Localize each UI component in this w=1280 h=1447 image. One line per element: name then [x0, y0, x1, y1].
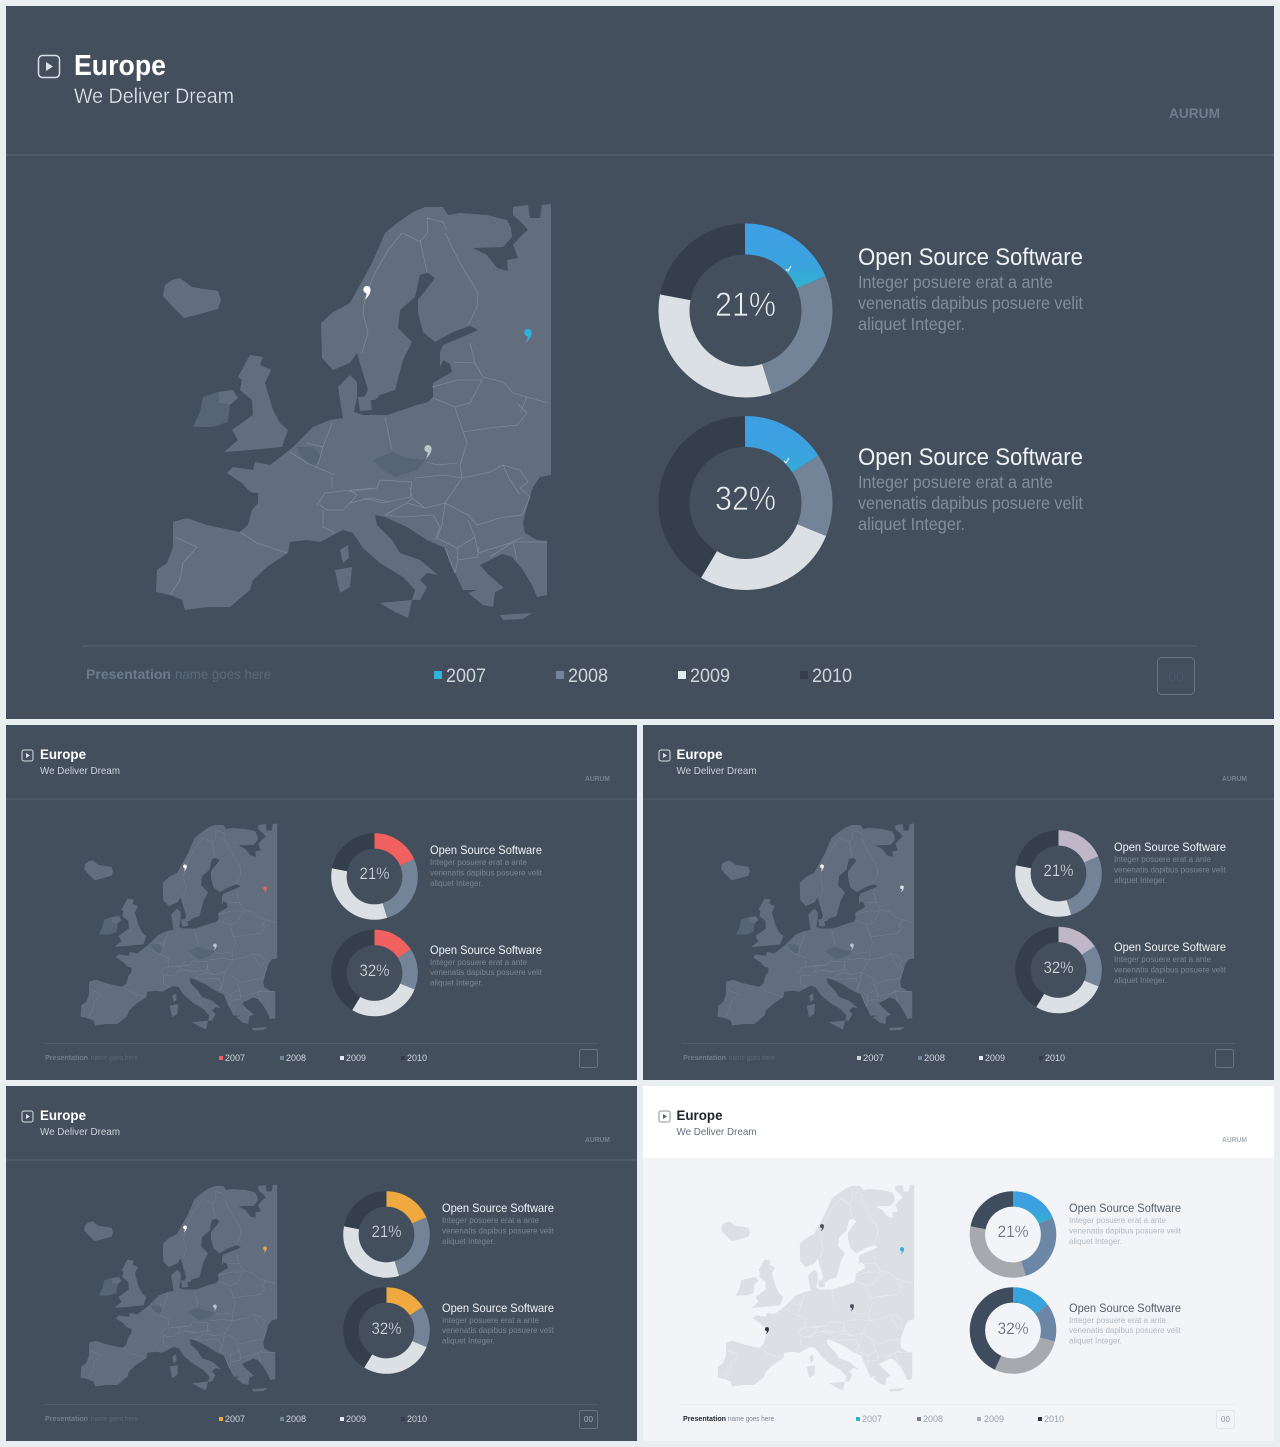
legend — [856, 1414, 1064, 1425]
map markers — [820, 864, 904, 950]
donut chart 21%: 21% — [360, 864, 390, 883]
legend — [219, 1053, 427, 1064]
text block: first donut: Open Source Software — [430, 843, 542, 857]
text block: first donut: Integer posuere erat a ante — [858, 272, 1053, 292]
footer presentation name — [683, 1055, 775, 1062]
donut chart 21% — [339, 841, 410, 912]
footer presentation name: name goes here — [175, 666, 271, 682]
text block: first donut: venenatis dapibus posuere velit — [858, 293, 1083, 313]
legend: 2008 — [286, 1414, 306, 1425]
title: Europe — [74, 50, 166, 82]
text block: first donut: aliquet Integer. — [430, 878, 483, 888]
map markers — [765, 1224, 904, 1335]
legend: 2010 — [407, 1053, 427, 1064]
page number box — [580, 1050, 598, 1068]
legend: 2008 — [923, 1414, 943, 1425]
footer presentation name: Presentation — [683, 1055, 726, 1062]
map of Europe — [156, 204, 551, 620]
page number box: 00 — [1221, 1415, 1230, 1424]
donut chart 32%: 32% — [360, 961, 390, 980]
legend: 2010 — [1044, 1414, 1064, 1425]
footer presentation name: Presentation — [45, 1055, 88, 1062]
donut chart 32%: 32% — [1044, 958, 1074, 977]
legend: 2007 — [225, 1053, 245, 1064]
subtitle: We Deliver Dream — [676, 1126, 757, 1138]
donut chart 21%: 21% — [1044, 861, 1074, 880]
donut chart 32% — [339, 937, 410, 1009]
text block: first donut: aliquet Integer. — [858, 314, 965, 334]
text block: first donut: venenatis dapibus posuere velit — [430, 868, 543, 878]
brand label: AURUM — [1222, 1137, 1247, 1144]
donut chart 32% — [1023, 934, 1094, 1006]
text block: first donut — [430, 843, 543, 888]
panel: main slide — [6, 6, 1274, 719]
text block: first donut: Open Source Software — [1114, 840, 1226, 854]
panel: light variant — [643, 1086, 1274, 1441]
text block: second donut — [442, 1301, 555, 1346]
subtitle: We Deliver Dream — [40, 765, 120, 777]
donut chart 32% — [351, 1295, 422, 1366]
footer presentation name: Presentation — [683, 1416, 726, 1423]
text block: second donut: aliquet Integer. — [1069, 1336, 1122, 1346]
legend — [434, 666, 852, 687]
text block: second donut — [1114, 940, 1227, 985]
icon: play button — [22, 1111, 33, 1122]
text block: second donut: aliquet Integer. — [858, 514, 965, 534]
legend: 2009 — [346, 1414, 366, 1425]
icon: play button — [659, 750, 670, 761]
donut chart 32% — [674, 432, 817, 574]
legend: 2009 — [346, 1053, 366, 1064]
donut chart 32%: 32% — [372, 1319, 402, 1338]
page number box — [1158, 658, 1194, 694]
title: Europe — [676, 1107, 723, 1123]
icon: play button — [38, 56, 60, 78]
footer presentation name: name goes here — [729, 1055, 775, 1062]
footer presentation name — [45, 1055, 138, 1062]
subtitle: We Deliver Dream — [40, 1126, 120, 1138]
text block: second donut: Integer posuere erat a ante — [858, 472, 1053, 492]
legend: 2008 — [568, 666, 608, 687]
page number box: 00 — [584, 1415, 593, 1424]
donut chart 21% — [351, 1199, 422, 1270]
text block: second donut: Integer posuere erat a ante — [1069, 1315, 1166, 1325]
text block: first donut — [1114, 840, 1227, 885]
text block: second donut: aliquet Integer. — [1114, 975, 1167, 985]
legend — [857, 1053, 1065, 1064]
donut chart 21%: 21% — [372, 1222, 402, 1241]
legend: 2009 — [985, 1053, 1005, 1064]
text block: first donut: Integer posuere erat a ante — [1069, 1215, 1166, 1225]
text block: first donut: aliquet Integer. — [1114, 875, 1167, 885]
legend: 2010 — [1045, 1053, 1065, 1064]
subtitle: We Deliver Dream — [676, 765, 757, 777]
brand label: AURUM — [1169, 105, 1220, 121]
footer presentation name: Presentation — [86, 666, 171, 682]
donut chart 21%: 21% — [998, 1222, 1028, 1241]
footer presentation name: name goes here — [91, 1055, 138, 1062]
footer presentation name — [683, 1416, 774, 1423]
donut chart 21% — [977, 1199, 1049, 1270]
text block: first donut: venenatis dapibus posuere velit — [1069, 1226, 1182, 1236]
text block: first donut: venenatis dapibus posuere velit — [1114, 864, 1227, 874]
text block: second donut — [858, 444, 1083, 534]
legend: 2007 — [225, 1414, 245, 1425]
map of Europe — [81, 824, 277, 1031]
legend: 2009 — [984, 1414, 1004, 1425]
text block: second donut: Open Source Software — [442, 1301, 554, 1315]
brand label: AURUM — [585, 776, 610, 783]
page number box — [1216, 1050, 1234, 1068]
text block: second donut: venenatis dapibus posuere velit — [430, 967, 543, 977]
footer presentation name: Presentation — [45, 1416, 88, 1423]
legend: 2008 — [924, 1053, 945, 1064]
donut chart 32%: 32% — [998, 1319, 1028, 1338]
text block: second donut — [430, 943, 543, 988]
text block: first donut: Open Source Software — [1069, 1201, 1181, 1215]
text block: second donut: aliquet Integer. — [442, 1336, 495, 1346]
icon: play button — [659, 1111, 670, 1122]
page number box — [1216, 1410, 1234, 1428]
text block: second donut: Open Source Software — [858, 444, 1083, 471]
footer presentation name: name goes here — [728, 1416, 774, 1423]
text block: first donut: Integer posuere erat a ante — [1114, 854, 1211, 864]
map of Europe — [718, 1185, 914, 1392]
panel: red variant — [6, 725, 637, 1080]
text block: second donut: venenatis dapibus posuere velit — [858, 493, 1083, 513]
text block: first donut: venenatis dapibus posuere velit — [442, 1226, 555, 1236]
text block: first donut — [1069, 1201, 1182, 1246]
map of Europe — [81, 1185, 277, 1392]
text block: first donut: Integer posuere erat a ante — [430, 857, 527, 867]
page number box — [580, 1410, 598, 1428]
text block: first donut — [442, 1201, 555, 1246]
page number box: 00 — [1168, 668, 1184, 684]
legend: 2007 — [863, 1053, 884, 1064]
donut chart 32%: 32% — [715, 480, 776, 518]
text block: first donut: Open Source Software — [858, 244, 1083, 271]
text block: second donut: venenatis dapibus posuere velit — [1069, 1325, 1182, 1335]
panel: mauve variant — [643, 725, 1274, 1080]
text block: second donut: Open Source Software — [1069, 1301, 1181, 1315]
text block: second donut: Integer posuere erat a ante — [1114, 954, 1211, 964]
legend: 2007 — [446, 666, 486, 687]
text block: first donut: aliquet Integer. — [1069, 1236, 1122, 1246]
donut chart 21% — [1023, 838, 1094, 909]
brand label: AURUM — [585, 1137, 610, 1144]
text block: second donut: venenatis dapibus posuere velit — [442, 1325, 555, 1335]
donut chart 32% — [977, 1295, 1049, 1366]
text block: first donut: Open Source Software — [442, 1201, 554, 1215]
text block: second donut: venenatis dapibus posuere velit — [1114, 964, 1227, 974]
text block: second donut: Integer posuere erat a ante — [442, 1315, 539, 1325]
text block: second donut — [1069, 1301, 1182, 1346]
text block: second donut: Open Source Software — [1114, 940, 1226, 954]
legend — [219, 1414, 427, 1425]
text block: second donut: aliquet Integer. — [430, 978, 483, 988]
map markers — [183, 1225, 267, 1311]
legend: 2010 — [407, 1414, 427, 1425]
panel: orange variant — [6, 1086, 637, 1441]
title: Europe — [40, 746, 86, 762]
text block: first donut: aliquet Integer. — [442, 1236, 495, 1246]
legend: 2009 — [690, 666, 730, 687]
map of Europe — [718, 824, 914, 1031]
footer presentation name — [45, 1416, 138, 1423]
footer presentation name — [86, 666, 271, 682]
legend: 2008 — [286, 1053, 306, 1064]
icon: play button — [22, 750, 33, 761]
donut chart 21% — [674, 239, 817, 382]
subtitle: We Deliver Dream — [74, 85, 234, 108]
title: Europe — [40, 1107, 86, 1123]
map markers — [363, 286, 532, 459]
text block: first donut: Integer posuere erat a ante — [442, 1215, 539, 1225]
text block: second donut: Open Source Software — [430, 943, 542, 957]
text block: first donut — [858, 244, 1083, 334]
text block: second donut: Integer posuere erat a ante — [430, 957, 527, 967]
legend: 2007 — [862, 1414, 882, 1425]
brand label: AURUM — [1222, 776, 1247, 783]
map markers — [183, 864, 267, 950]
legend: 2010 — [812, 666, 852, 687]
donut chart 21%: 21% — [715, 286, 776, 324]
footer presentation name: name goes here — [91, 1416, 138, 1423]
title: Europe — [676, 746, 723, 762]
